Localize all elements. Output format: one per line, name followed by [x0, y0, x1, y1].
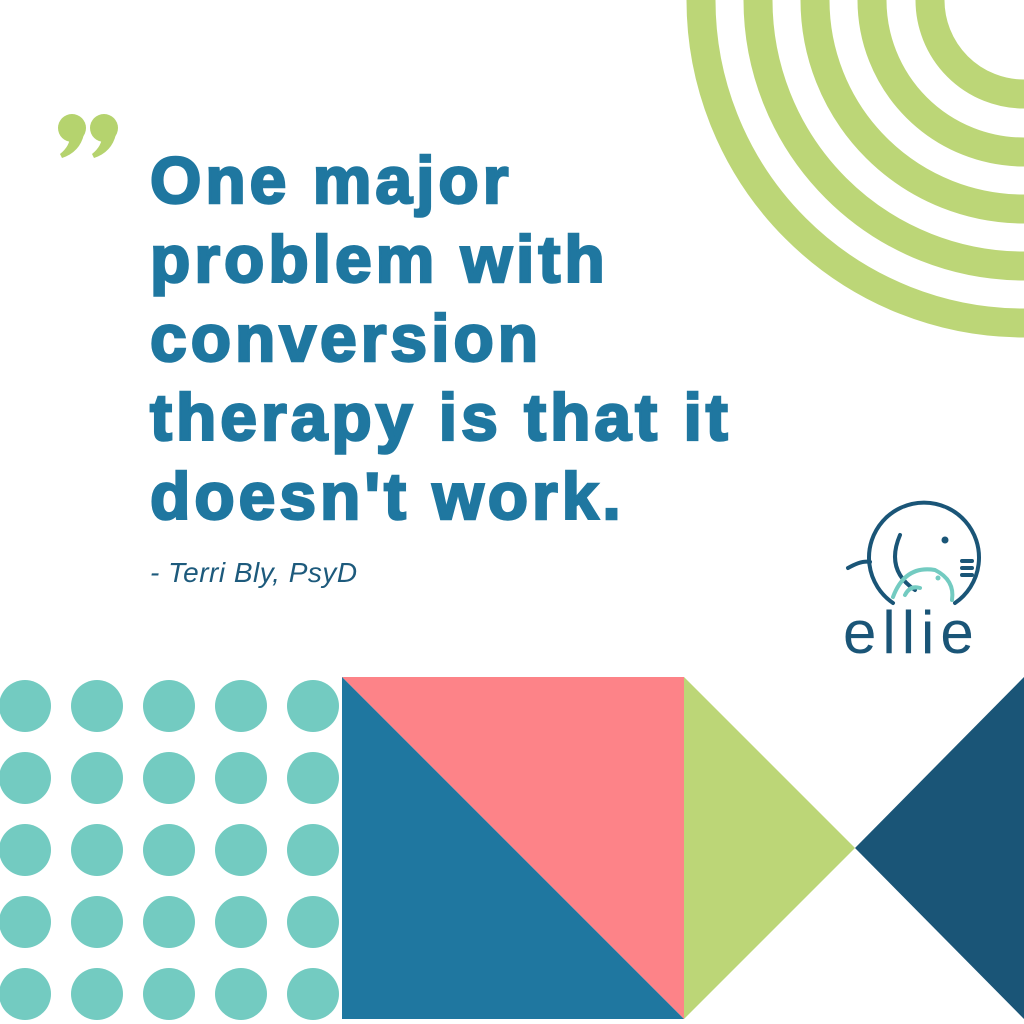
concentric arcs [701, 0, 1024, 323]
quote text: problem with [150, 222, 609, 296]
author: - Terri Bly, PsyD [150, 557, 358, 588]
quote text: doesn't work. [150, 459, 625, 533]
logo text: ellie [843, 599, 980, 666]
quote mark [58, 114, 118, 158]
quote text: therapy is that it [150, 380, 732, 454]
quote text: One major [150, 143, 512, 217]
dot grid [0, 680, 339, 1020]
quote text: conversion [150, 301, 542, 375]
logo: elephant [848, 503, 979, 603]
geometric blocks [342, 677, 1024, 1019]
quote text [150, 143, 732, 533]
